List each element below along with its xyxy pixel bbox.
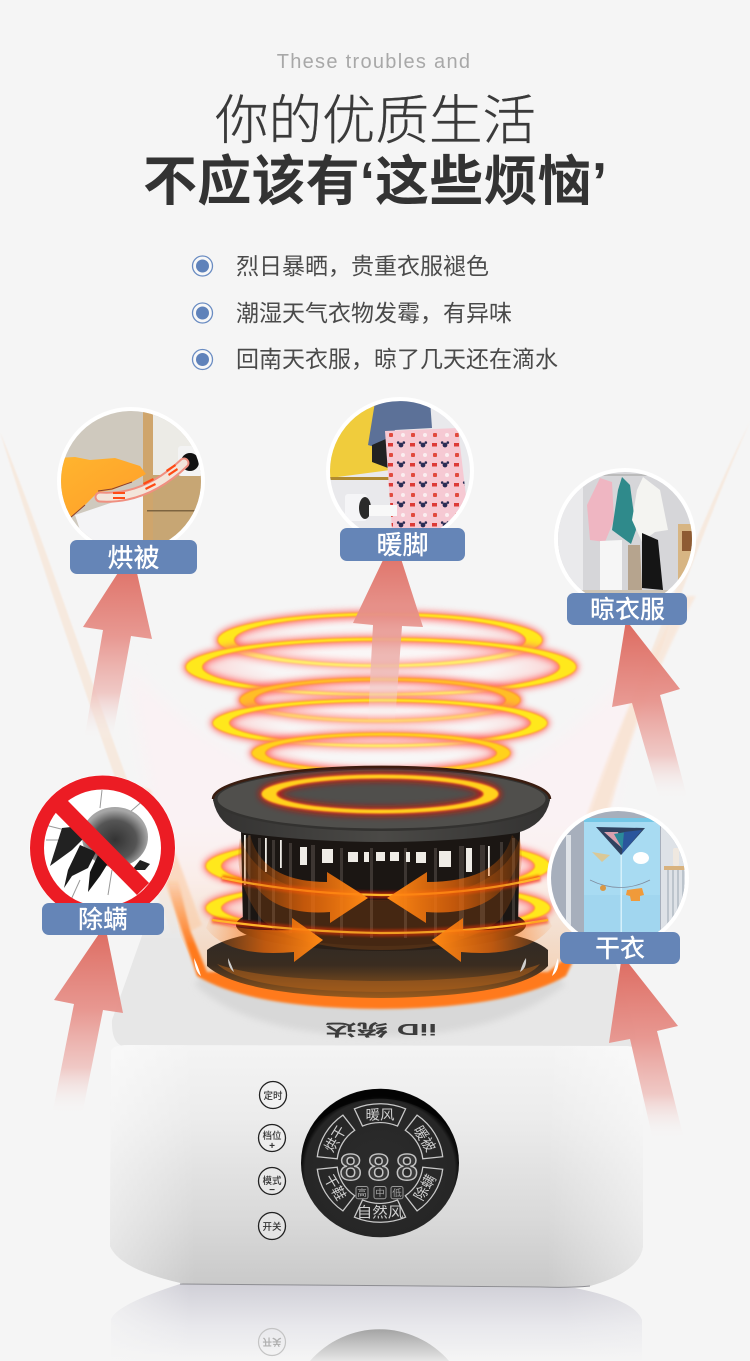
label	[567, 593, 687, 625]
shadow under the fan base	[195, 960, 565, 1036]
heat ring 8	[206, 883, 550, 933]
control dial: 自然风	[357, 1205, 403, 1221]
grille windows	[244, 835, 490, 885]
label	[70, 540, 197, 574]
button: level	[258, 1124, 286, 1152]
grille cylinder	[241, 832, 520, 946]
heat ring 2	[186, 638, 576, 696]
icon: no mites sign	[30, 775, 176, 903]
label: 晾衣服	[590, 596, 665, 624]
heat beams behind product	[0, 422, 750, 935]
label: 烘被	[107, 543, 160, 573]
fan unit	[207, 767, 550, 998]
top plate	[213, 767, 550, 831]
bullet 1: 烈日暴晒，贵重衣服褪色	[236, 253, 489, 279]
product body	[110, 1045, 643, 1287]
product reflection: 开关	[262, 1336, 282, 1348]
button: power	[258, 1212, 286, 1240]
button: level: 档位	[262, 1130, 282, 1142]
bullet list	[192, 253, 558, 372]
heat ring 5	[252, 733, 510, 773]
title line 2: 不应该有‘这些烦恼’	[143, 152, 607, 212]
callout: mite removal	[30, 775, 176, 935]
label	[560, 932, 680, 964]
mite illustration	[45, 790, 150, 902]
red arrow: to mite removal	[53, 925, 123, 1115]
button: mode: −	[269, 1185, 275, 1196]
photo: quilt	[57, 407, 205, 540]
red arrow: to clothes drying	[609, 955, 683, 1140]
bullet 2: 潮湿天气衣物发霉，有异味	[236, 300, 512, 326]
bullet 3: 回南天衣服，晾了几天还在滴水	[236, 346, 558, 372]
callout: quilt drying	[55, 407, 208, 574]
heat ring 7	[206, 838, 550, 894]
title line 1: 你的优质生活	[215, 92, 536, 151]
inward airflow arrows	[206, 835, 552, 962]
translucent ring fronts	[212, 878, 548, 933]
callout: clothes drying	[547, 807, 691, 964]
control dial: 暖风	[366, 1107, 394, 1122]
button: level: +	[269, 1141, 275, 1152]
control dial: 烘干	[321, 1123, 350, 1154]
brand logo: iiD 统达	[325, 1020, 437, 1039]
button: timer	[260, 1082, 286, 1108]
heat ring 1	[218, 613, 542, 667]
photo: foot warmer	[326, 397, 474, 528]
arrow: lower left	[206, 918, 323, 962]
control dial: 高	[357, 1187, 367, 1198]
callout: foot warming	[326, 397, 474, 561]
english subtitle: These troubles and	[277, 51, 471, 73]
arrow: lower right	[432, 915, 552, 962]
product top surface	[112, 885, 636, 1047]
red arrow: to quilt drying	[83, 551, 152, 740]
button: mode	[258, 1168, 286, 1196]
heat rings above the fan	[186, 613, 576, 933]
product reflection	[111, 1284, 642, 1361]
label	[42, 903, 164, 935]
control dial: 干鞋	[321, 1172, 349, 1203]
label: 暖脚	[376, 530, 429, 560]
red arrow: to foot warming	[353, 537, 423, 722]
top plate side	[213, 800, 550, 842]
button: power: 开关	[262, 1221, 282, 1233]
button: mode: 模式	[262, 1175, 282, 1187]
orange veil on the fan base	[238, 838, 522, 950]
control dial: 暖被	[410, 1123, 439, 1154]
heat ring 3	[240, 678, 520, 722]
red arrow: to clothes airing	[612, 620, 687, 800]
button: timer: 定时	[263, 1090, 283, 1102]
photo: drying wardrobe	[547, 807, 689, 932]
control dial	[301, 1089, 459, 1237]
heat ring 4	[213, 699, 547, 747]
fan base	[207, 925, 548, 998]
label	[340, 528, 465, 561]
photo: clothes rack	[554, 468, 696, 593]
heat ring 6 on plate	[262, 775, 498, 813]
label: 除螨	[78, 906, 128, 934]
callout: clothes airing	[554, 468, 696, 625]
arrow: upper left	[240, 835, 368, 923]
control dial: 中	[375, 1187, 385, 1198]
arrow: upper right	[387, 835, 522, 923]
control dial: 888	[340, 1148, 424, 1189]
base collar	[236, 899, 526, 951]
control buttons	[258, 1082, 286, 1240]
pale heat wedge beside the base	[120, 780, 615, 978]
control dial: 低	[392, 1187, 402, 1198]
control dial: 除螨	[411, 1172, 439, 1203]
label: 干衣	[595, 935, 645, 963]
orange glow around fan base	[165, 880, 600, 1009]
